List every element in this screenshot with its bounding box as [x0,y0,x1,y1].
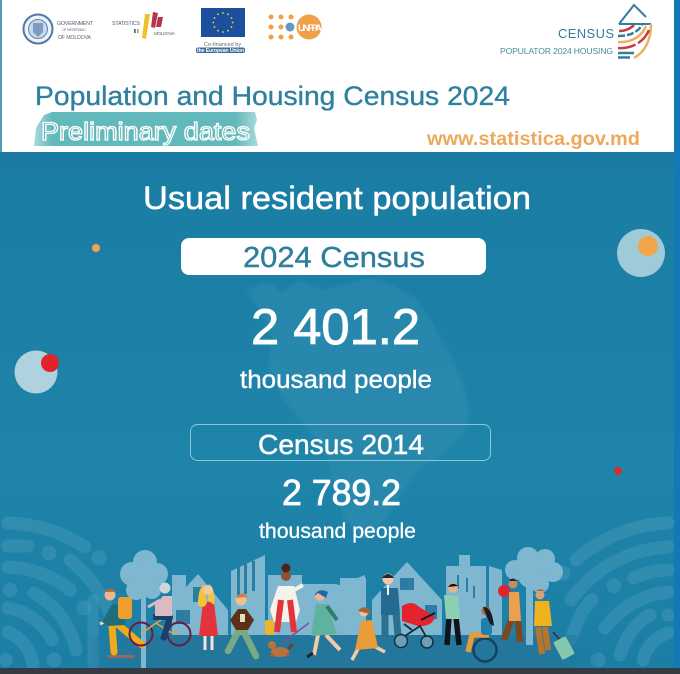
bottom dark strip [0,668,680,674]
logo: Statistics Moldova: STATISTICS [112,21,140,27]
logo: European Union flag [196,8,245,54]
logo: Government of Moldova: OF THE REPUBLIC [62,28,87,32]
person walking with brown jacket [228,594,256,656]
label pill 2024 [181,238,486,275]
woman in green dress [307,590,340,657]
accent circle top left [92,244,100,252]
house left [172,574,228,635]
logo: UNFPA [268,14,322,40]
background panel [0,152,680,674]
dog on leash [268,623,309,657]
panel: 2024 census [181,238,486,394]
accent circle top right [617,229,665,277]
accent circle left [14,350,59,394]
building right [446,555,486,635]
person on bicycle [130,582,190,646]
logo: Census: CENSUS [558,26,614,41]
woman in white coat [265,564,303,635]
right edge strip [674,0,680,668]
illustration: city skyline [80,547,600,668]
value 2014: 2 789.2 [282,472,401,513]
tree left [120,550,168,668]
man in blue suit [381,574,400,636]
panel: header [0,0,674,152]
house right [372,562,442,635]
heading: Usual resident population [143,180,531,216]
red stroller [394,603,435,648]
label pill 2024: 2024 Census [243,242,425,274]
logo: Census: POPULATOR 2024 HOUSING [500,46,613,56]
website url: www.statistica.gov.md [426,128,640,150]
map of Moldova watermark [246,278,470,540]
logo: Statistics Moldova: MOLDOVA [154,31,176,36]
building pair [302,575,365,635]
building with figure [268,575,302,635]
value 2024: 2 401.2 [251,299,420,355]
girl running in orange dress [352,607,385,660]
logo: Census [500,5,651,58]
label box 2014: Census 2014 [258,429,424,460]
logo: European Union flag: the European Union [197,48,244,54]
man with red guitar [498,578,521,642]
woman in wheelchair [468,606,496,662]
logo: UNFPA: UNFPA [298,23,322,34]
tree right [505,547,563,645]
panel: 2014 census [190,424,490,543]
unit 2014: thousand people [259,520,416,543]
logo: Government of Moldova: OF MOLDOVA [58,35,92,41]
illustration: people [100,564,575,662]
man in green shirt [444,583,460,645]
logo: Statistics Moldova [112,12,176,39]
label box 2014 [190,424,490,460]
accent dot right [614,467,622,475]
traveller with suitcase [534,589,575,660]
subtitle: preliminary dates: Preliminary dates [41,118,250,146]
title: Population and Housing Census 2024 [35,81,510,111]
logo: Government of Moldova: GOVERNMENT [57,21,94,27]
tower [231,555,265,635]
logo: Government of Moldova [24,14,94,44]
logo: European Union flag: Co-financed by [204,42,241,48]
woman in red dress [198,584,218,650]
decorative ripple right [556,523,674,668]
unit 2024: thousand people [240,366,432,394]
decorative ripple left [0,523,113,668]
person on skateboard [100,589,142,658]
